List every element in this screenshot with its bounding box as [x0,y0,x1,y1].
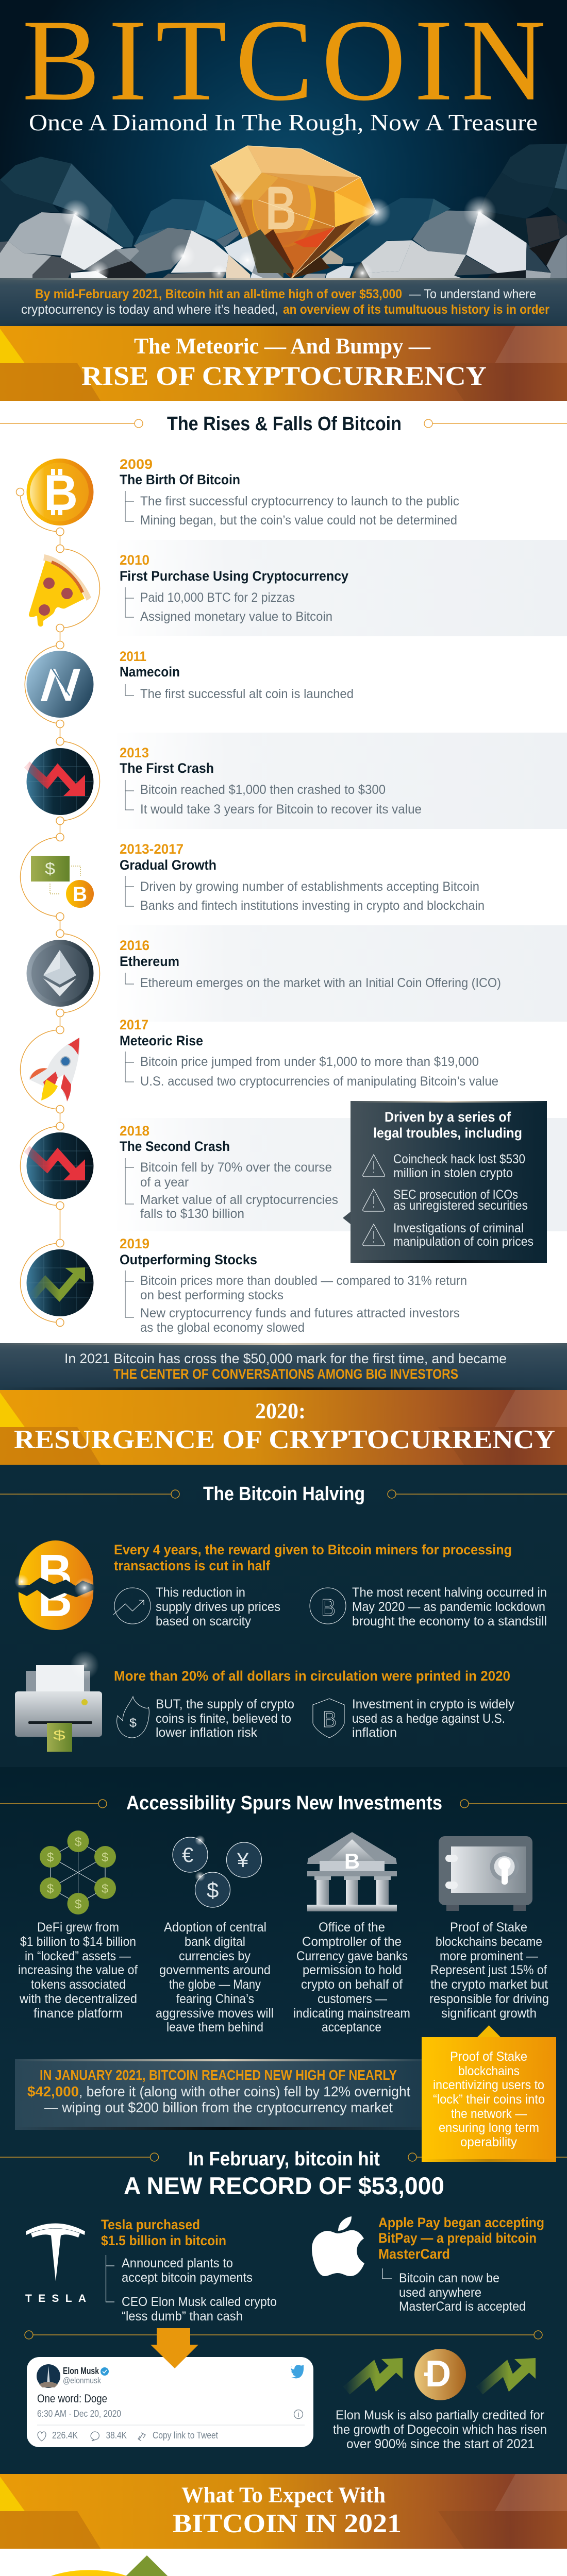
text: 2010 [120,552,348,624]
timeline rail [16,488,100,1326]
text: dogecoin [333,2408,547,2451]
rocks: left [0,157,284,285]
text: central bank digital currencies [156,1920,274,2035]
panel: january 2021 band [15,2059,432,2130]
text: central bank digital currencies: aggressive moves will [156,2006,274,2021]
text: supply finite [156,1697,294,1740]
callout: legal troubles: legal troubles, including [373,1125,522,1141]
icon: defi network [40,1831,116,1914]
icon: rocket [29,1038,80,1101]
panel: hero [0,0,567,285]
icon: dollar to bitcoin exchange: $ [45,859,55,878]
text: 2016: Ethereum [120,954,179,969]
icon: dollar to bitcoin exchange: B [73,883,87,906]
heading: What To Expect With [181,2483,386,2507]
text: central bank digital currencies: bank digital [185,1935,245,1949]
icon: dogecoin with rising arrows [346,2349,536,2400]
icon: defi network: $ [75,1835,81,1849]
heading: in february a new record: A NEW RECORD OF $53,000 [124,2172,444,2199]
text: 2013: It would take 3 years for Bitcoin to recover its value [140,802,422,817]
text: apple pay: MasterCard is accepted [399,2299,526,2314]
icon: namecoin [27,651,94,718]
panel: intro band [0,278,567,326]
rocks: right [295,144,567,285]
text: proof of stake: the crypto market but [430,1977,548,1992]
heading: accessibility spurs new investments [0,1792,567,1814]
intro text: — To understand where [409,287,536,301]
text: 2017: Bitcoin price jumped from under $1,000 to more than $19,000 [140,1055,479,1069]
tweet stats: 226.4K [52,2430,78,2441]
text: 2018: Bitcoin fell by 70% over the course [140,1160,332,1175]
text: central bank digital currencies: governments around [159,1963,271,1977]
callout: legal troubles: million in stolen crypto [393,1166,513,1180]
text: comptroller: acceptance [322,2020,381,2035]
text: comptroller: crypto on behalf of [301,1977,403,1992]
text: central bank digital currencies: currencies by [179,1949,251,1963]
text: 2013: 2013 [120,745,149,760]
icon: bitcoin coin: B [44,464,78,521]
icon: split bitcoin egg: B [38,1570,72,1628]
intro text: cryptocurrency is today and where it’s headed, [21,302,278,317]
panel: 2021 band: THE CENTER OF CONVERSATIONS AMONG BIG INVESTORS [113,1366,458,1382]
text: 2013-2017: Banks and fintech institutions investing in crypto and blockchain [140,899,485,913]
timeline entry: 2010 [29,552,348,626]
text: supply finite: lower inflation risk [156,1725,257,1740]
text: comptroller: permission to hold [303,1963,402,1977]
icon: defi network: $ [75,1897,81,1911]
icon: bitcoin diamond: B [265,174,296,243]
timeline entry: 2011 [27,649,354,718]
text: apple pay: BitPay — a prepaid bitcoin [378,2230,537,2246]
icon: bitcoin diamond [210,146,376,278]
text: 2013-2017 [120,841,485,913]
tweet card: @elonmusk [63,2376,101,2385]
text: apple pay [378,2215,544,2314]
text: 2013-2017: 2013-2017 [120,841,184,857]
text: 2017 [120,1017,498,1089]
text: proof of stake: blockchains became [436,1935,542,1949]
heading: in february a new record [0,2148,567,2199]
text: 2010: Assigned monetary value to Bitcoin [140,609,332,624]
text: apple pay: Bitcoin can now be [399,2271,499,2285]
heading: accessibility spurs new investments: Accessibility Spurs New Investments [126,1792,442,1814]
icon: dogecoin with rising arrows: D [425,2353,451,2395]
icon: currency coins: € [182,1844,193,1867]
panel: section banner resurgence [0,1390,567,1465]
icon: burning dollar [117,1697,149,1738]
text: 2011: Namecoin [120,664,180,680]
panel: january 2021 band: IN JANUARY 2021, BITCOIN REACHED NEW HIGH OF NEARLY [40,2067,397,2083]
callout: proof of stake gold: blockchains [458,2064,520,2078]
text: defi: with the decentralized [19,1992,137,2006]
text: comptroller [293,1920,410,2035]
panel: section banner what to expect [0,2474,567,2549]
text: supply: This reduction in [156,1585,245,1600]
callout: legal troubles: Investigations of criminal [393,1221,524,1235]
text: supply finite: coins is finite, believed to [156,1711,291,1726]
text: proof of stake: significant growth [441,2006,537,2021]
text: proof of stake: more prominent — [440,1949,538,1963]
text: dollars printed: More than 20% of all dollars in circulation were printed in 2020 [114,1668,510,1684]
icon: bitcoin circle [310,1588,346,1624]
tweet card: Elon Musk [63,2366,99,2376]
tweet card [27,2357,313,2447]
text: 2011 [120,649,354,701]
heading: the bitcoin halving: The Bitcoin Halving [203,1483,365,1505]
icon: split bitcoin egg [14,1538,95,1632]
icon: bitcoin circle: B [321,1594,336,1621]
text: central bank digital currencies: leave them behind [166,2020,263,2035]
icon: defi network: $ [47,1851,54,1865]
icon: currency coins: $ [207,1878,219,1902]
icon: burning dollar: $ [129,1716,137,1730]
callout: proof of stake gold: “lock” their coins into [433,2092,545,2107]
text: defi: $1 billion to $14 billion [20,1935,136,1949]
icon: bank [307,1832,397,1911]
text: 2018: Market value of all cryptocurrencies [140,1193,338,1207]
text: apple pay: MasterCard [378,2246,450,2262]
text: 2009: Mining began, but the coin’s value could not be determined [140,513,457,528]
text: defi: increasing the value of [18,1963,138,1977]
text: supply [156,1585,280,1629]
text: defi: in “locked” assets — [25,1949,131,1963]
text: 2013 [120,745,422,817]
callout: proof of stake gold: incentivizing users to [433,2078,544,2092]
icon: split bitcoin egg: B [38,1544,72,1602]
icon: defi network: $ [102,1882,108,1896]
text: 2010: First Purchase Using Cryptocurrency [120,568,348,584]
text: dogecoin: Elon Musk is also partially credited for [336,2408,544,2422]
heading: RESURGENCE OF CRYPTOCURRENCY [14,1425,555,1454]
icon: warning [363,1224,385,1246]
text: hedge [352,1697,514,1740]
text: apple pay: used anywhere [399,2285,481,2300]
text: 2019: 2019 [120,1236,149,1251]
text: 2019: Bitcoin prices more than doubled — compared to 31% return [140,1274,467,1288]
sparkles [61,190,496,283]
text: hedge: used as a hedge against U.S. [352,1711,505,1726]
timeline entry: 2018 [27,1123,338,1221]
text: 2018: of a year [140,1175,189,1190]
heading: The Meteoric — And Bumpy — [134,334,431,359]
heading: in february a new record: In February, bitcoin hit [188,2148,380,2170]
timeline entry: 2017 [29,1017,498,1101]
logo: tesla: TESLA [25,2293,86,2304]
text: 2017: Meteoric Rise [120,1033,203,1048]
text: comptroller: customers — [318,1992,387,2006]
icon: bitcoin shield [313,1699,344,1738]
text: comptroller: indicating mainstream [293,2006,410,2021]
heading: the rises and falls of bitcoin: The Rises & Falls Of Bitcoin [167,413,402,435]
icon: currency coins: ¥ [237,1849,249,1872]
text: 2018 [120,1123,338,1221]
icon: defi network: $ [47,1882,54,1896]
text: 2013: The First Crash [120,760,214,776]
text: comptroller: Currency gave banks [296,1949,408,1963]
text: supply: based on scarcity [156,1614,251,1629]
text: central bank digital currencies: Adoption of central [164,1920,266,1935]
callout: proof of stake gold: operability [460,2135,517,2149]
text: defi: DeFi grew from [37,1920,119,1935]
text: 2009: The Birth Of Bitcoin [120,472,240,487]
text: apple pay: Apple Pay began accepting [378,2215,544,2230]
text: halving headline: transactions is cut in half [114,1558,271,1573]
text: 2017: 2017 [120,1017,148,1032]
panel: section banner rise of cryptocurrency [0,326,567,401]
timeline entry: 2019 [27,1236,467,1335]
text: 2016: 2016 [120,938,149,953]
timeline entry: 2009 [27,456,459,528]
text: recent halving [352,1585,547,1629]
text: 2010: 2010 [120,552,149,568]
tweet card: One word: Doge [37,2392,107,2405]
icon: warning [363,1155,385,1177]
panel: dark section background [0,1465,567,2474]
text: 2018: falls to $130 billion [140,1207,244,1221]
text: tesla [101,2217,277,2324]
text: central bank digital currencies: the globe — Many [169,1977,261,1992]
text: recent halving: brought the economy to a standstill [352,1614,547,1629]
panel: 2021 band [0,1343,567,1390]
icon: growth chart [27,1249,94,1316]
icon: ethereum [27,940,94,1007]
logo: tesla [25,2224,86,2304]
text: tesla: Tesla purchased [101,2217,200,2232]
text: 2018: The Second Crash [120,1139,230,1154]
text: defi [18,1920,138,2021]
panel: january 2021 band: — wiping out $200 billion from the cryptocurrency market [44,2099,393,2115]
callout: legal troubles [343,1101,547,1263]
icon: price chart [113,1588,151,1624]
text: supply finite: BUT, the supply of crypto [156,1697,294,1711]
text: proof of stake [429,1920,549,2021]
panel: timeline background stripes [0,540,567,1231]
icon: money printer: $ [53,1727,66,1743]
icon: crash chart [27,748,94,815]
text: 2013-2017: Driven by growing number of establishments accepting Bitcoin [140,879,479,894]
text: 2019: on best performing stocks [140,1288,284,1302]
icon: dollar to bitcoin exchange [31,856,94,908]
text: 2010: Paid 10,000 BTC for 2 pizzas [140,590,295,605]
callout: proof of stake gold: Proof of Stake [450,2049,527,2064]
text: comptroller: Office of the [319,1920,385,1935]
timeline entry: 2013-2017 [31,841,485,913]
panel: january 2021 band: $42,000 [27,2083,79,2099]
text: proof of stake: Proof of Stake [450,1920,527,1935]
callout: proof of stake gold [422,2025,556,2162]
heading: the bitcoin halving [0,1483,567,1505]
divider connector [25,2331,542,2339]
text: supply: supply drives up prices [156,1600,280,1614]
tweet stats: Copy link to Tweet [153,2430,218,2441]
tweet stats [38,2430,218,2441]
text: proof of stake: responsible for driving [429,1992,549,2006]
text: 2019: as the global economy slowed [140,1320,305,1335]
text: 2016 [120,938,501,990]
text: 2016: Ethereum emerges on the market with an Initial Coin Offering (ICO) [140,976,501,990]
text: 2017: U.S. accused two cryptocurrencies of manipulating Bitcoin’s value [140,1074,498,1089]
tweet card: 6:30 AM · Dec 20, 2020 [37,2409,121,2419]
text: halving headline [114,1542,512,1573]
text: defi: finance platform [34,2006,123,2021]
verified badge [101,2367,109,2376]
heading: RISE OF CRYPTOCURRENCY [81,362,487,391]
callout: legal troubles: Coincheck hack lost $530 [393,1152,525,1166]
text: 2018: 2018 [120,1123,149,1139]
icon: twitter bird [291,2365,304,2378]
intro text [21,287,549,317]
text: 2011: 2011 [120,649,146,664]
text: 2009: The first successful cryptocurrency to launch to the public [140,494,459,509]
arrow: down to tweet [151,2328,198,2368]
avatar [37,2364,60,2388]
subtitle: Once A Diamond In The Rough, Now A Treasure [29,110,538,135]
text: hedge: inflation [352,1725,397,1740]
text: proof of stake: Represent just 15% of [430,1963,547,1977]
text: comptroller: Comptroller of the [302,1935,402,1949]
text: tesla: $1.5 billion in bitcoin [101,2233,226,2248]
text: 2009 [120,456,459,528]
text: tesla: “less dumb” than cash [122,2309,243,2324]
text: halving headline: Every 4 years, the reward given to Bitcoin miners for processing [114,1542,512,1557]
text: 2019: Outperforming Stocks [120,1252,257,1267]
icon: warning [363,1189,385,1211]
logo: apple [312,2216,364,2276]
icon: info [294,2410,303,2418]
text: dogecoin: the growth of Dogecoin which has risen [333,2422,547,2437]
icon: crash chart [27,1132,94,1199]
callout: legal troubles: as unregistered securities [393,1198,528,1213]
icon: coin stack with arrow [21,2555,184,2576]
timeline entry: 2016 [27,938,501,1007]
icon: money printer [15,1651,102,1752]
text: 2009: 2009 [120,456,153,472]
heading: 2020: [255,1399,306,1423]
heading: BITCOIN IN 2021 [173,2509,402,2538]
panel: 2021 band: In 2021 Bitcoin has cross the $50,000 mark for the first time, and became [64,1351,507,1366]
text: 2019: New cryptocurrency funds and futures attracted investors [140,1306,460,1320]
callout: proof of stake gold: the network — [451,2107,527,2121]
text: 2013: Bitcoin reached $1,000 then crashed to $300 [140,783,386,797]
icon: bank: B [344,1849,360,1873]
icon: currency coins [173,1835,262,1907]
text: tesla: accept bitcoin payments [122,2270,253,2285]
callout: legal troubles: SEC prosecution of ICOs [393,1188,518,1202]
icon: bitcoin shield: B [323,1707,337,1732]
text: hedge: Investment in crypto is widely [352,1697,514,1711]
text: recent halving: The most recent halving occurred in [352,1585,547,1600]
tweet stats: 38.4K [106,2430,127,2441]
text: recent halving: May 2020 — as pandemic lockdown [352,1600,545,1614]
text: tesla: Announced plants to [122,2256,233,2270]
intro text: By mid-February 2021, Bitcoin hit an all-time high of over $53,000 [35,287,402,301]
text: defi: tokens associated [31,1977,126,1992]
text: central bank digital currencies: fearing China’s [176,1992,254,2006]
text: tesla: CEO Elon Musk called crypto [122,2295,277,2309]
text: 2013-2017: Gradual Growth [120,857,216,873]
callout: legal troubles: Driven by a series of [385,1109,511,1125]
text: 2011: The first successful alt coin is launched [140,687,354,701]
icon: bitcoin coin [27,459,94,526]
timeline entry: 2013 [27,745,422,817]
callout: legal troubles: manipulation of coin prices [393,1234,533,1249]
icon: pizza slice [29,554,91,626]
icon: defi network: $ [102,1851,108,1865]
icon: safe [439,1836,532,1911]
heading: the rises and falls of bitcoin [0,413,567,435]
panel: january 2021 band: , before it (along with other coins) fell by 12% overnight [79,2083,410,2099]
text: dogecoin: over 900% since the start of 2021 [346,2437,535,2451]
callout: proof of stake gold: ensuring long term [439,2121,539,2135]
text: 2019 [120,1236,467,1335]
